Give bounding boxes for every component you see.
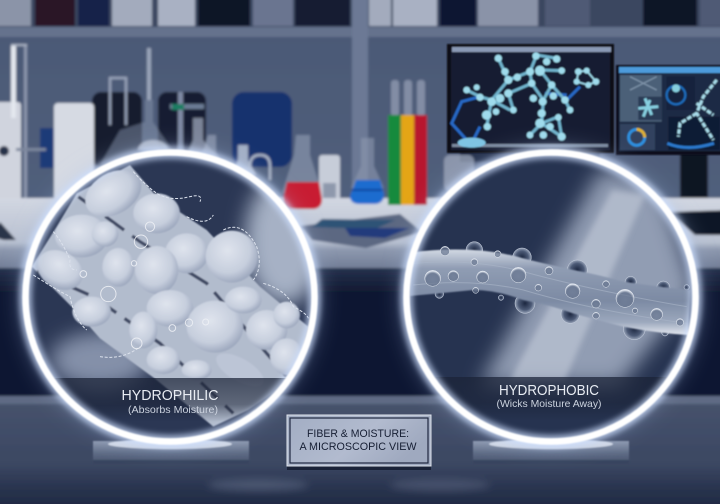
hydrophilic fiber clump xyxy=(30,160,325,427)
stand base: right xyxy=(473,439,629,464)
stand base: left xyxy=(93,439,249,464)
monitor: molecule structure xyxy=(447,44,614,153)
title plaque: A MICROSCOPIC VIEW xyxy=(300,441,417,453)
water splashes and bubbles xyxy=(33,172,308,357)
title plaque xyxy=(287,415,431,470)
label: hydrophobic: HYDROPHOBIC xyxy=(499,382,599,399)
cabinet xyxy=(0,268,720,396)
label: hydrophilic: HYDROPHILIC xyxy=(122,387,219,404)
dashboard panels xyxy=(620,75,720,150)
desk surface xyxy=(0,404,720,504)
monitor: data dashboard xyxy=(616,65,720,155)
diagonal light streak xyxy=(480,170,695,385)
label: hydrophobic xyxy=(496,382,602,410)
glowing ring: left xyxy=(26,152,314,442)
hydrophobic caption band xyxy=(436,377,666,411)
panel: hydrophilic lens xyxy=(19,146,325,448)
panel: hydrophobic lens xyxy=(400,146,702,448)
tools on the counter xyxy=(0,210,720,248)
monitor stand xyxy=(460,150,708,215)
ledge xyxy=(0,396,720,406)
label: hydrophilic xyxy=(122,387,219,416)
bench equipment xyxy=(0,44,425,217)
molecule graphic xyxy=(452,52,599,148)
glowing ring: right xyxy=(406,152,696,442)
hydrophobic fiber with droplets xyxy=(410,242,690,340)
label: hydrophilic: (Absorbs Moisture) xyxy=(128,404,218,416)
hydrophilic caption band xyxy=(54,378,286,420)
colored tubes xyxy=(388,115,474,205)
flasks with coloured liquid xyxy=(283,180,384,209)
countertop xyxy=(0,198,720,272)
title text: FIBER & MOISTURE: xyxy=(307,428,409,440)
shelf with blurred containers xyxy=(0,0,720,205)
label: hydrophobic: (Wicks Moisture Away) xyxy=(496,398,602,410)
